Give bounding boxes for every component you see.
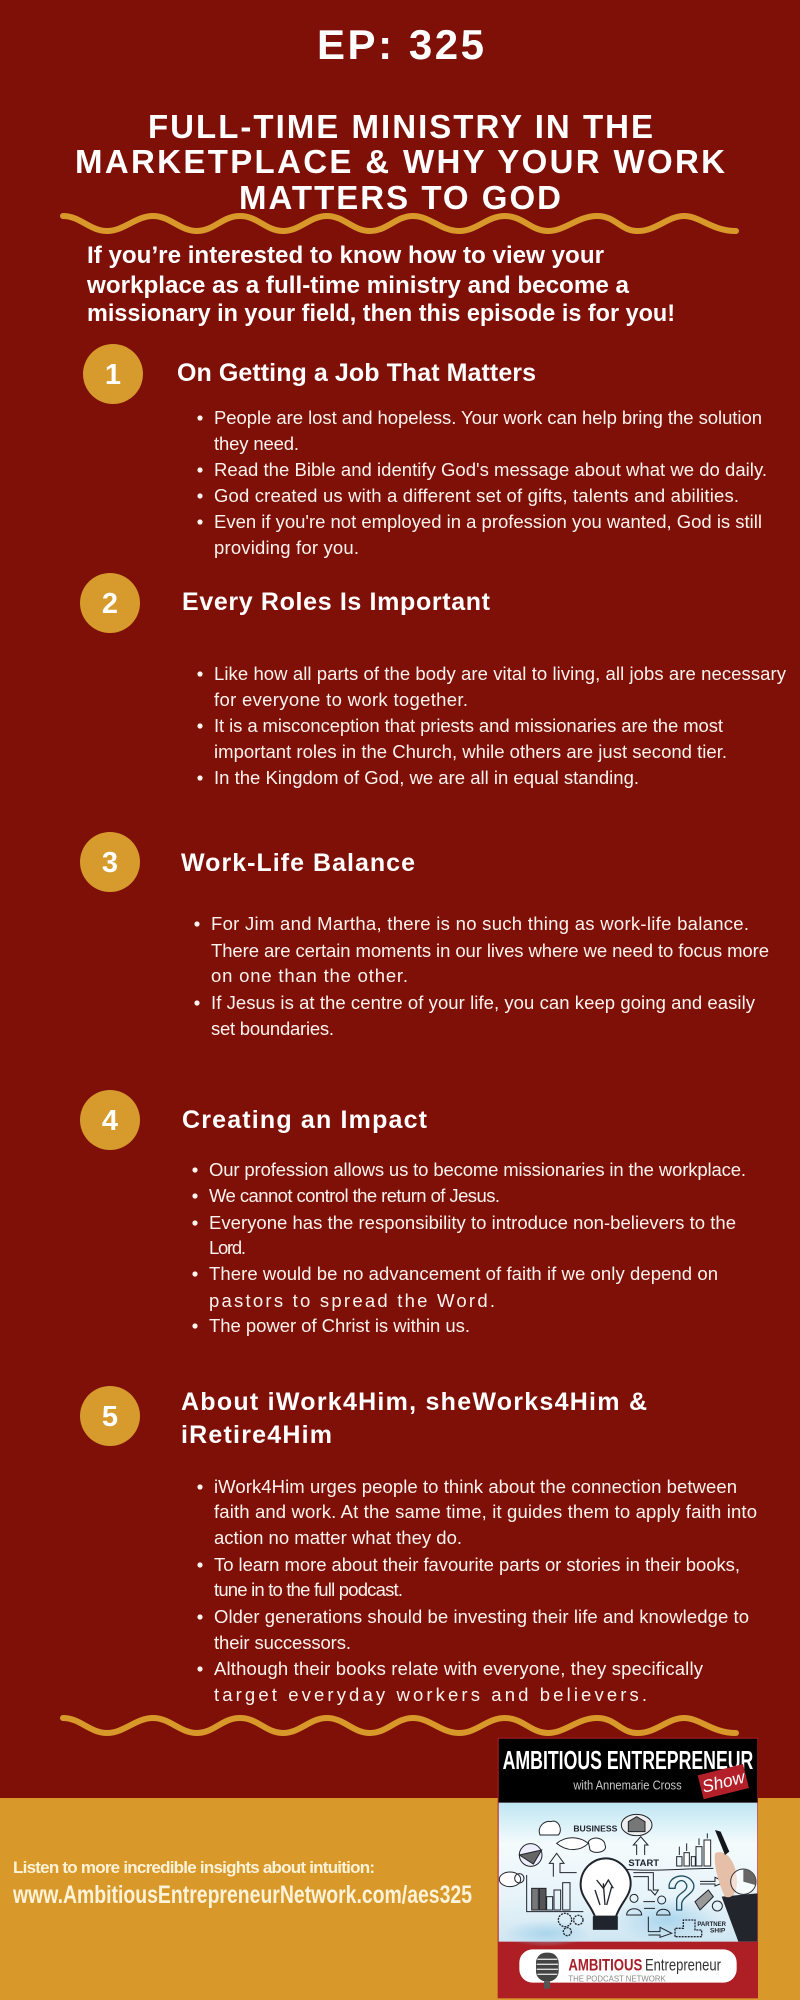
footer band (0, 1798, 800, 2000)
bullet list 2: for everyone to work together. (214, 689, 468, 710)
gears and puzzles (558, 1913, 702, 1937)
network logo pill: AMBITIOUS (568, 1956, 642, 1975)
bullet list 4: Everyone has the responsibility to introduce non-believers to the (209, 1212, 736, 1233)
heading 2: Every Roles Is Important (182, 588, 491, 616)
heading 1: On Getting a Job That Matters (177, 359, 536, 387)
doodle labels: PARTNER (697, 1922, 727, 1928)
section 3 (80, 832, 769, 1039)
bullet list 1: People are lost and hopeless. Your work can help bring the solution (214, 407, 762, 428)
bullet list 2: important roles in the Church, while others are just second tier. (214, 741, 727, 762)
bullet list 5: tune in to the full podcast. (214, 1579, 403, 1600)
bullet list 3: If Jesus is at the centre of your life, you can keep going and easily (211, 992, 756, 1013)
bullet list 4: We cannot control the return of Jesus. (209, 1185, 500, 1206)
badge 2: 2 (102, 588, 118, 620)
cover header: Show (700, 1766, 748, 1797)
bullet list 5 (197, 1476, 757, 1705)
bullet list 5: target everyday workers and believers. (214, 1684, 647, 1705)
speech bubbles and gauge (499, 1844, 542, 1887)
doodle labels: SHIP (710, 1929, 725, 1935)
badge 5 (80, 1386, 140, 1446)
section 1 (83, 344, 767, 558)
section 5 (80, 1386, 757, 1705)
bullet list 5: action no matter what they do. (214, 1527, 462, 1548)
podcast cover (498, 1738, 758, 1998)
bullet list 1: providing for you. (214, 537, 359, 558)
bullet list 5: Older generations should be investing their life and knowledge to (214, 1606, 749, 1627)
title: FULL-TIME MINISTRY IN THE (148, 108, 653, 145)
bullet list 1: Read the Bible and identify God's message about what we do daily. (214, 459, 767, 480)
title: MATTERS TO GOD (239, 179, 561, 216)
heading 3: Work-Life Balance (181, 849, 415, 877)
intro text (86, 242, 675, 327)
bullet list 1: they need. (214, 433, 299, 454)
badge 2 (80, 573, 140, 633)
cover header: with Annemarie Cross (572, 1777, 682, 1792)
hand, pen and sleeve (715, 1830, 757, 1942)
bullet list 5: Although their books relate with everyone, they specifically (214, 1658, 704, 1679)
bullet list 3 (194, 913, 769, 1039)
doodle labels: START (628, 1858, 659, 1868)
cloud rocket and house doodles (539, 1814, 652, 1852)
bullet list 3: set boundaries. (211, 1018, 334, 1039)
bullet list 1 (197, 407, 767, 558)
bullet list 2: It is a misconception that priests and missionaries are the most (214, 715, 723, 736)
badge 4: 4 (102, 1105, 118, 1137)
intro text: If you’re interested to know how to view your (87, 242, 604, 269)
badge 4 (80, 1090, 140, 1150)
bullet list 4 (192, 1159, 746, 1336)
bullet list 4: Our profession allows us to become missionaries in the workplace. (209, 1159, 746, 1180)
footer call to action: Listen to more incredible insights about intuition: (13, 1858, 375, 1877)
network logo pill: Entrepreneur (645, 1956, 721, 1975)
bullet list 1: God created us with a different set of gifts, talents and abilities. (214, 485, 739, 506)
intro text: missionary in your field, then this episode is for you! (87, 300, 675, 327)
lightbulb (581, 1858, 631, 1929)
doodle labels (573, 1824, 727, 1935)
section 4 (80, 1090, 746, 1336)
bullet list 4: There would be no advancement of faith if we only depend on (209, 1263, 718, 1284)
badge 3: 3 (102, 847, 118, 879)
bullet list 3: For Jim and Martha, there is no such thing as work-life balance. (211, 913, 749, 934)
title: MARKETPLACE & WHY YOUR WORK (75, 143, 725, 180)
heading 5: About iWork4Him, sheWorks4Him & (181, 1388, 647, 1416)
title (75, 108, 725, 216)
badge 1: 1 (105, 359, 121, 391)
badge 3 (80, 832, 140, 892)
bullet list 3: There are certain moments in our lives where we need to focus more (211, 940, 769, 961)
bullet list 5: iWork4Him urges people to think about the connection between (214, 1476, 737, 1497)
footer call to action: www.AmbitiousEntrepreneurNetwork.com/aes325 (12, 1881, 472, 1909)
episode number: EP: 325 (317, 21, 484, 68)
heading 5 (181, 1388, 647, 1449)
bullet list 5: their successors. (214, 1632, 351, 1653)
cover illustration (499, 1803, 757, 1947)
badge 1 (83, 344, 143, 404)
cover header (499, 1739, 757, 1803)
bullet list 4: pastors to spread the Word. (209, 1290, 495, 1311)
section 2 (80, 573, 787, 788)
network logo pill: THE PODCAST NETWORK (568, 1974, 666, 1983)
right chart (677, 1833, 711, 1866)
heading 4: Creating an Impact (182, 1106, 428, 1134)
question mark and people (627, 1876, 694, 1915)
network logo pill (519, 1949, 737, 1989)
bullet list 4: Lord. (209, 1237, 246, 1258)
footer call to action (12, 1858, 472, 1909)
bullet list 2: In the Kingdom of God, we are all in equal standing. (214, 767, 639, 788)
doodle labels: BUSINESS (573, 1824, 618, 1833)
left chart (527, 1875, 583, 1912)
arrows (549, 1837, 725, 1937)
bullet list 5: faith and work. At the same time, it guides them to apply faith into (214, 1501, 757, 1522)
wavy divider bottom (63, 1718, 736, 1733)
badge 5: 5 (102, 1401, 118, 1433)
intro text: workplace as a full-time ministry and become a (86, 272, 630, 299)
wavy divider top (63, 216, 736, 231)
bullet list 3: on one than the other. (211, 965, 408, 986)
bullet list 5: To learn more about their favourite parts or stories in their books, (214, 1554, 740, 1575)
bullet list 2 (197, 663, 787, 788)
money and magnifier (695, 1890, 722, 1911)
bullet list 4: The power of Christ is within us. (209, 1315, 470, 1336)
bullet list 2: Like how all parts of the body are vital to living, all jobs are necessary (214, 663, 787, 684)
bullet list 1: Even if you're not employed in a profession you wanted, God is still (214, 511, 762, 532)
heading 5: iRetire4Him (181, 1421, 332, 1449)
